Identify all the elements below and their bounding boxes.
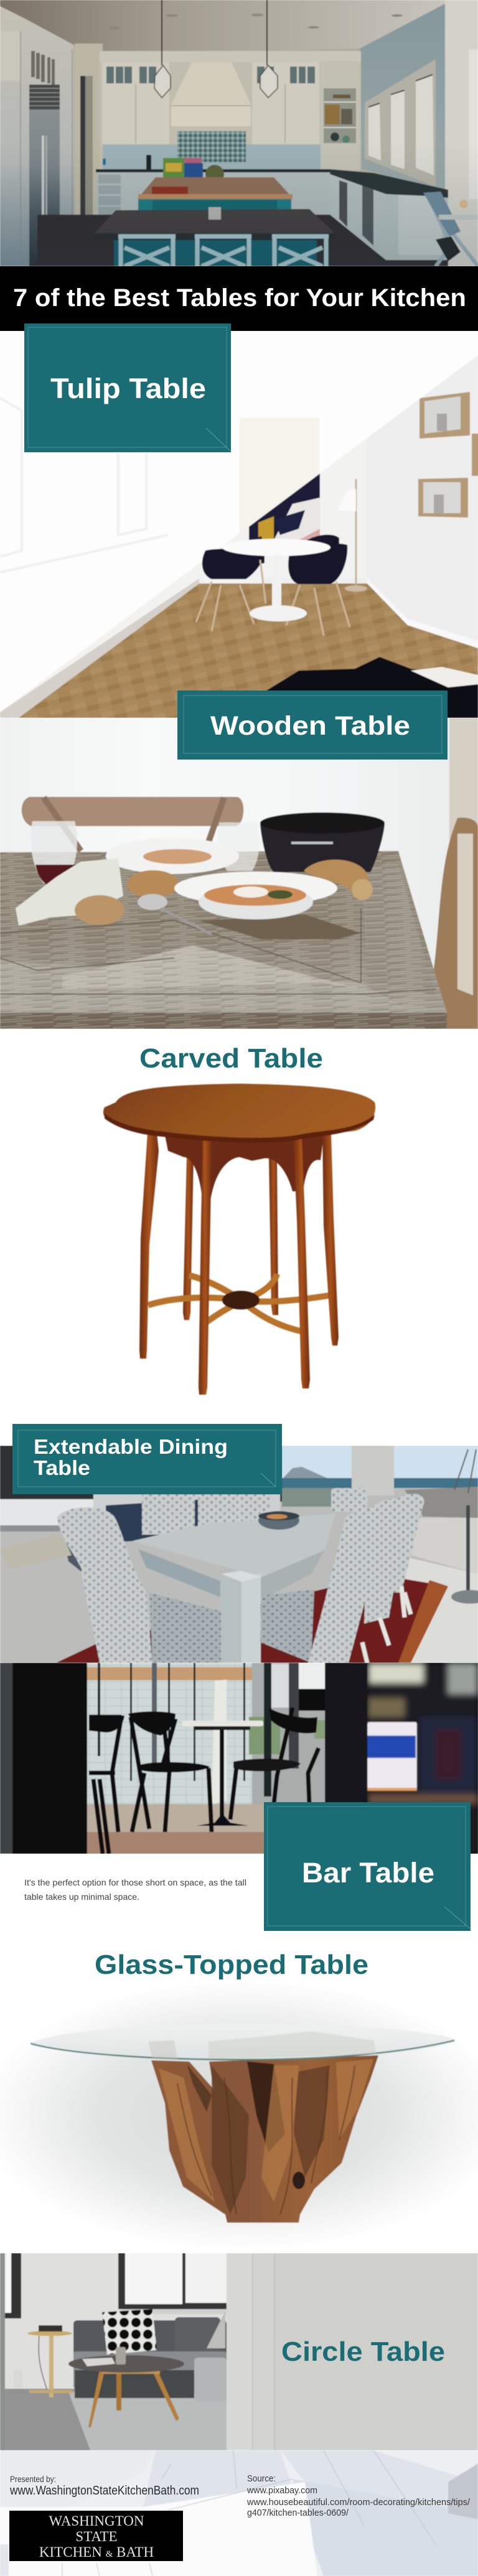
label text: Bar Table: [302, 1857, 434, 1889]
photo: extendable dining table: [0, 1446, 478, 1663]
polka dot pillow: [102, 2309, 157, 2355]
white diagonal overlay: [0, 331, 478, 712]
sources: Source:: [247, 2473, 276, 2484]
presented by credit: [9, 2475, 199, 2498]
right chair: [429, 817, 478, 1029]
chair back: [22, 797, 243, 826]
title band: [0, 266, 478, 331]
right windows: [365, 59, 436, 187]
side table: [27, 2325, 73, 2397]
label text: Wooden Table: [210, 711, 410, 741]
floor: [87, 1804, 268, 1854]
apron: [165, 1135, 324, 1201]
left chair: [149, 1593, 221, 1663]
windows: [5, 2253, 21, 2318]
bar table description: table takes up minimal space.: [24, 1892, 139, 1902]
photo: white dining room with round tulip table: [0, 331, 478, 718]
back chairs: [142, 1494, 195, 1535]
fridge: [29, 109, 60, 266]
back plate: [106, 838, 239, 874]
chairs: [89, 1708, 319, 1854]
bar stools: [118, 236, 329, 266]
scalloped table top: [103, 1084, 375, 1140]
wooden table label box: [177, 690, 448, 760]
parquet floor: [19, 584, 478, 718]
logo: Washington State Kitchen & Bath: WASHINGTON: [49, 2513, 144, 2529]
left cabinets: [0, 6, 75, 266]
table top: [0, 851, 447, 1029]
table: [182, 1721, 263, 1826]
items on island: [162, 157, 185, 178]
label text: Extendable Dining: [34, 1435, 228, 1458]
bread: [127, 870, 179, 898]
logo: Washington State Kitchen & Bath: KITCHEN & BATH: [39, 2544, 154, 2560]
napkin: [16, 858, 123, 926]
heading: circle table: Circle Table: [281, 2337, 445, 2367]
skirting: [0, 579, 199, 718]
photo: living room with circle table: [0, 2253, 478, 2450]
wine glasses: [30, 821, 77, 883]
back legs: [183, 1157, 194, 1320]
sofa: [73, 2320, 227, 2364]
cowhide rug: [261, 657, 478, 718]
extendable dining table label box: Table: [34, 1456, 90, 1479]
bowl: [258, 1511, 299, 1530]
presented by credit: www.WashingtonStateKitchenBath.com: [9, 2484, 199, 2498]
hero photo: kitchen interior: [0, 0, 478, 266]
right chairs: [389, 1494, 424, 1593]
range hood: [171, 62, 251, 106]
logo: Washington State Kitchen & Bath: STATE: [75, 2529, 118, 2544]
heading: carved table: Carved Table: [139, 1043, 323, 1074]
title: 7 of the Best Tables for Your Kitchen: [13, 284, 466, 312]
wall below cabinets: [103, 144, 321, 170]
wall panel: [227, 2253, 478, 2450]
chairs: [202, 535, 347, 584]
red rug: [56, 1574, 448, 1663]
floor: [37, 215, 448, 266]
dining table: [95, 209, 335, 233]
extendable dining table label box: [12, 1424, 282, 1494]
front legs: [139, 1133, 159, 1359]
bar table description: It's the perfect option for those short on space, as the tall: [24, 1877, 246, 1887]
dark door frame: [325, 1663, 367, 1806]
floor and rug: [5, 2389, 227, 2450]
floor lamp: [355, 479, 357, 591]
photo: rustic wooden table with food: [0, 718, 478, 1029]
table: [133, 1514, 335, 1577]
photo: bar table and chairs: [0, 1663, 478, 1854]
white media unit: [0, 1499, 93, 1525]
trunk base: [151, 2055, 378, 2223]
kitchen island: [141, 177, 289, 195]
base cabinets and counter: [96, 172, 330, 216]
doorway: [85, 76, 93, 215]
pot: [260, 824, 385, 873]
front plate with food: [174, 872, 337, 905]
logo: Washington State Kitchen & Bath: [9, 2511, 183, 2561]
label text: Tulip Table: [50, 373, 206, 404]
upper cabinets: [102, 62, 169, 144]
pendant lights: [162, 0, 267, 65]
wall art: [300, 529, 321, 541]
tulip table: [222, 539, 330, 621]
sources: www.pixabay.com: [246, 2485, 317, 2496]
carved table illustration: [103, 1084, 375, 1395]
high chair: [426, 193, 478, 266]
footer background: [0, 2450, 478, 2576]
presented by credit: Presented by:: [10, 2475, 56, 2484]
spoon: [138, 894, 167, 910]
circle coffee table: [68, 2347, 184, 2427]
tulip table label box: [24, 323, 231, 452]
wall shelves: [419, 392, 470, 439]
right base run: [330, 169, 448, 198]
shelf unit: [324, 65, 354, 83]
blurred bar interior: [367, 1663, 478, 1854]
glass top: [30, 2024, 456, 2060]
sources: g407/kitchen-tables-0609/: [247, 2508, 349, 2518]
heading: glass-topped table: Glass-Topped Table: [95, 1950, 368, 1980]
sources: www.housebeautiful.com/room-decorating/kitchens/tips/: [246, 2497, 471, 2508]
sources: [246, 2473, 471, 2518]
stretchers: [148, 1274, 331, 1331]
bar table label box: [264, 1802, 471, 1931]
floor lamp: [466, 1505, 470, 1593]
photo: glass-topped table on tree trunk: [0, 1979, 478, 2251]
